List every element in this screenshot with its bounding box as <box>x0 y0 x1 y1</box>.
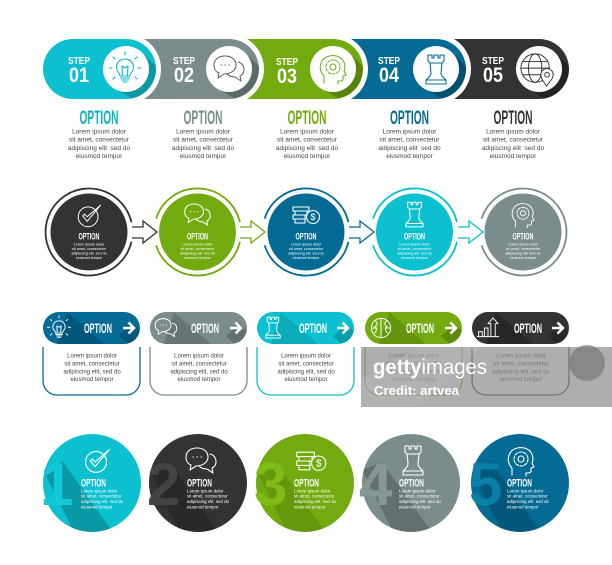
numbered circle 1: adipiscing elit sed do <box>81 499 124 504</box>
numbered circle 1: 1 <box>40 451 73 518</box>
step captions <box>68 108 544 160</box>
step 01 <box>43 39 161 99</box>
caption 5: sit amet, consectetur <box>483 136 544 144</box>
numbered circle 1: eiusmod tempor <box>81 504 113 510</box>
caption 2: OPTION <box>184 108 222 129</box>
numbered circle 2: Lorem ipsum dolor <box>187 488 224 494</box>
caption 1: Lorem ipsum dolor <box>72 128 127 136</box>
flow circle 3: eiusmod tempor <box>293 256 320 260</box>
card 4 <box>364 312 463 396</box>
numbered circle 5: eiusmod tempor <box>507 504 539 510</box>
flow circle 4: Lorem ipsum dolor <box>399 242 431 246</box>
numbered circle 4: adipiscing elit sed do <box>399 499 442 504</box>
card 1: Lorem ipsum dolor <box>67 354 117 360</box>
numbered circle 2: OPTION <box>187 478 212 490</box>
caption 3: OPTION <box>288 108 326 129</box>
flow circle 3: sit amet, consectetur <box>289 247 324 251</box>
card 3: OPTION <box>299 321 327 336</box>
numbered circle 4: Lorem ipsum dolor <box>399 488 436 494</box>
flow circle 2: eiusmod tempor <box>184 256 211 260</box>
caption 3: adipiscing elit sed do <box>276 145 338 152</box>
step band: five chained steps <box>43 39 569 99</box>
caption 3: eiusmod tempor <box>284 153 331 160</box>
numbered circle 5: OPTION <box>507 478 532 490</box>
step 04: STEP <box>378 55 400 67</box>
watermark band <box>361 345 612 407</box>
caption 1 <box>68 108 130 160</box>
numbered circle 3: Lorem ipsum dolor <box>294 488 331 494</box>
caption 3: Lorem ipsum dolor <box>280 128 335 136</box>
numbered circle 2 <box>147 434 247 538</box>
numbered circle 4: OPTION <box>399 478 424 490</box>
card 3: eiusmod tempor <box>284 377 328 383</box>
step 04 <box>351 39 471 99</box>
card 2: eiusmod tempor <box>177 377 221 383</box>
step 05: STEP <box>482 55 504 67</box>
card 4: sit amet, consectetur <box>386 362 442 368</box>
step 01: 01 <box>69 64 89 87</box>
numbered circle 4: 4 <box>359 451 393 518</box>
flow circle 1: OPTION <box>78 232 100 242</box>
numbered circle 4: sit amet, consectetur <box>399 494 440 498</box>
flow circle 4: eiusmod tempor <box>401 256 428 260</box>
numbered circle 3 <box>254 434 354 538</box>
step 03: 03 <box>277 65 297 88</box>
numbered circle 2: 2 <box>147 451 180 518</box>
step 03 <box>247 39 368 99</box>
numbered circle 3: sit amet, consectetur <box>294 494 335 498</box>
step 04: 04 <box>379 64 399 87</box>
step 03: STEP <box>276 56 298 68</box>
flow circle 2: adipiscing elit sed do <box>180 252 215 256</box>
card 1: adipiscing elit, sed do <box>63 370 121 376</box>
card 1: sit amet, consectetur <box>64 362 120 368</box>
button cards row <box>43 312 584 395</box>
caption 5: eiusmod tempor <box>490 153 537 160</box>
watermark text <box>373 356 487 398</box>
card 4: Lorem ipsum dolor <box>389 354 439 360</box>
flow circle 1: Lorem ipsum dolor <box>74 242 105 246</box>
arrow 1 <box>132 221 157 243</box>
caption 2: Lorem ipsum dolor <box>176 128 231 136</box>
caption 4 <box>378 108 441 160</box>
flow circle 2: Lorem ipsum dolor <box>182 242 214 246</box>
flow circle 4: OPTION <box>404 232 425 242</box>
caption 1: OPTION <box>80 108 118 129</box>
caption 3 <box>276 108 338 160</box>
numbered circle 2: adipiscing elit sed do <box>187 499 230 504</box>
icon: coins: $ <box>316 458 322 470</box>
numbered circle 5: sit amet, consectetur <box>507 494 548 498</box>
caption 2: eiusmod tempor <box>180 153 227 160</box>
numbered circle 3: eiusmod tempor <box>294 504 326 510</box>
flow circle 5 <box>482 188 566 276</box>
card 3: Lorem ipsum dolor <box>281 354 331 360</box>
numbered circle 5: Lorem ipsum dolor <box>507 488 544 494</box>
step 02: 02 <box>174 64 194 87</box>
card 3: adipiscing elit, sed do <box>277 370 335 376</box>
circle flow row <box>46 188 566 276</box>
caption 5: OPTION <box>494 108 532 129</box>
step 02: STEP <box>173 55 195 67</box>
card 3: sit amet, consectetur <box>278 362 334 368</box>
flow circle 5: Lorem ipsum dolor <box>508 242 539 246</box>
card 2: adipiscing elit, sed do <box>170 370 228 376</box>
card 5: adipiscing elit, sed do <box>492 370 550 376</box>
step 02 <box>144 39 264 99</box>
card 1: eiusmod tempor <box>70 377 114 383</box>
card 5: eiusmod tempor <box>499 377 543 383</box>
numbered circle 5 <box>469 434 569 538</box>
caption 4: adipiscing elit sed do <box>378 145 441 152</box>
card 4: eiusmod tempor <box>392 377 436 383</box>
flow circle 2: OPTION <box>187 232 208 242</box>
numbered circle 1: sit amet, consectetur <box>81 494 122 498</box>
caption 2: sit amet, consectetur <box>173 136 234 144</box>
flow circle 1: sit amet, consectetur <box>72 247 107 251</box>
card 5: OPTION <box>514 321 542 336</box>
caption 2: adipiscing elit sed do <box>172 145 234 152</box>
numbered circle 1: Lorem ipsum dolor <box>81 488 118 494</box>
flow circle 4: sit amet, consectetur <box>397 247 432 251</box>
numbered circle 1 <box>40 434 141 538</box>
numbered circle 3: 3 <box>254 451 287 518</box>
flow circle 5: sit amet, consectetur <box>506 247 541 251</box>
caption 4: Lorem ipsum dolor <box>383 128 437 136</box>
flow circle 5: OPTION <box>512 232 534 242</box>
flow circle 3 <box>265 188 348 276</box>
card 4: OPTION <box>406 321 434 336</box>
caption 5: adipiscing elit sed do <box>482 145 544 152</box>
flow circle 4 <box>373 188 457 276</box>
numbered circles row <box>40 434 569 538</box>
flow circle 3: Lorem ipsum dolor <box>291 242 322 246</box>
icon: coins: $ <box>310 212 316 222</box>
caption 1: eiusmod tempor <box>76 153 123 160</box>
caption 5: Lorem ipsum dolor <box>486 128 541 136</box>
numbered circle 5: adipiscing elit sed do <box>507 499 550 504</box>
flow circle 4: adipiscing elit sed do <box>397 252 432 256</box>
numbered circle 4 <box>359 434 460 538</box>
card 2: Lorem ipsum dolor <box>174 354 224 360</box>
card 4: adipiscing elit, sed do <box>385 370 443 376</box>
numbered circle 2: eiusmod tempor <box>187 504 219 510</box>
card 2 <box>149 312 248 396</box>
caption 4: OPTION <box>390 108 429 129</box>
card 2: sit amet, consectetur <box>171 362 227 368</box>
numbered circle 5: 5 <box>469 451 502 518</box>
card 5: Lorem ipsum dolor <box>496 354 546 360</box>
caption 4: eiusmod tempor <box>386 153 434 160</box>
numbered circle 3: adipiscing elit sed do <box>294 499 337 504</box>
step 01: STEP <box>68 55 90 67</box>
flow circle 1 <box>46 188 131 276</box>
caption 5 <box>482 108 544 160</box>
caption 3: sit amet, consectetur <box>277 136 338 144</box>
flow circle 2 <box>156 188 240 276</box>
flow circle 3: adipiscing elit sed do <box>288 252 324 256</box>
numbered circle 3: OPTION <box>294 478 319 490</box>
flow circle 1: eiusmod tempor <box>76 256 103 260</box>
watermark text: Credit: artvea <box>374 383 460 398</box>
card 3 <box>256 312 355 396</box>
flow circle 2: sit amet, consectetur <box>180 247 215 251</box>
watermark text: gettyimages <box>373 356 487 379</box>
caption 2 <box>172 108 234 160</box>
caption 4: sit amet, consectetur <box>380 136 440 144</box>
card 5 <box>471 312 570 396</box>
numbered circle 2: sit amet, consectetur <box>187 494 228 498</box>
arrow 2 <box>240 221 265 243</box>
card 1 <box>42 312 141 396</box>
step 05 <box>454 39 569 99</box>
caption 1: adipiscing elit sed do <box>68 145 130 152</box>
card 1: OPTION <box>84 321 112 336</box>
arrow 3 <box>349 221 374 243</box>
numbered circle 1: OPTION <box>81 478 106 490</box>
numbered circle 4: eiusmod tempor <box>399 504 431 510</box>
card 2: OPTION <box>191 321 219 336</box>
flow circle 5: eiusmod tempor <box>510 256 537 260</box>
arrow 4 <box>458 221 483 243</box>
step 05: 05 <box>483 64 503 87</box>
flow circle 3: OPTION <box>296 232 317 242</box>
card 5: sit amet, consectetur <box>493 362 549 368</box>
flow circle 5: adipiscing elit sed do <box>505 252 541 256</box>
flow circle 1: adipiscing elit sed do <box>71 252 107 256</box>
caption 1: sit amet, consectetur <box>69 136 130 144</box>
